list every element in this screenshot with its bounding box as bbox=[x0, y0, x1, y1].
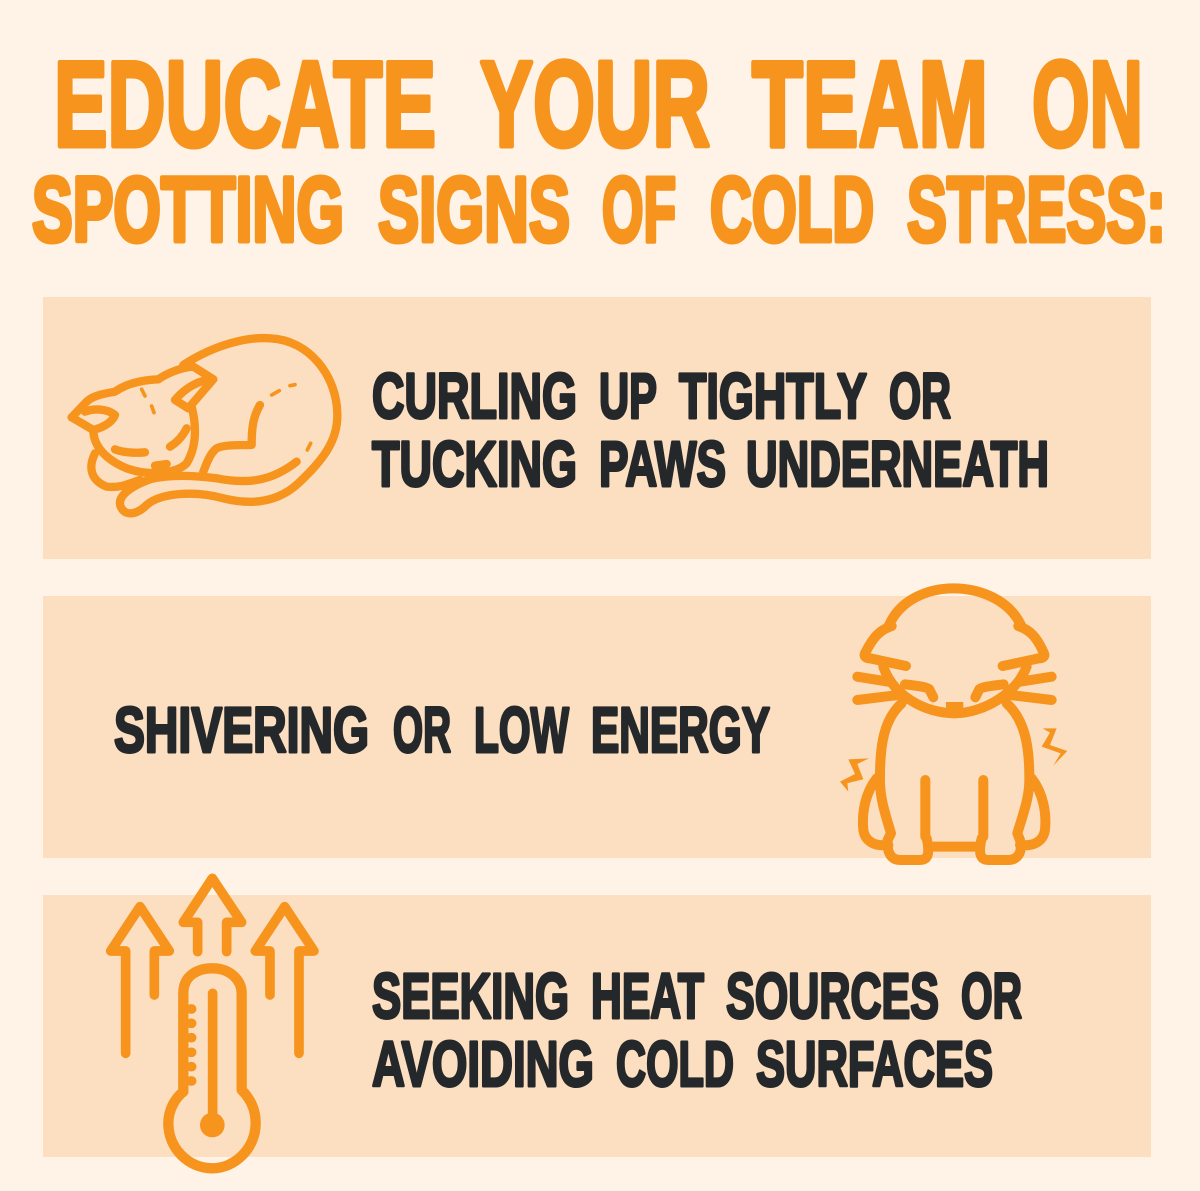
text: seeking heat: SEEKING bbox=[372, 960, 569, 1032]
text: seeking heat: SURFACES bbox=[756, 1028, 993, 1100]
title: EDUCATE bbox=[54, 36, 436, 172]
icon: curled-up cat bbox=[72, 338, 337, 513]
panel: curling up bbox=[43, 297, 1151, 559]
text: seeking heat: SOURCES bbox=[726, 960, 939, 1032]
text: curling up: CURLING bbox=[372, 360, 577, 432]
title: TEAM bbox=[752, 36, 988, 172]
text: shivering: SHIVERING bbox=[114, 694, 369, 766]
text: seeking heat: HEAT bbox=[591, 960, 704, 1032]
text: curling up: TIGHTLY bbox=[679, 360, 867, 432]
text: curling up bbox=[372, 360, 1049, 500]
panel: shivering bbox=[43, 588, 1151, 860]
text: seeking heat: COLD bbox=[616, 1028, 734, 1100]
text: seeking heat: OR bbox=[961, 960, 1022, 1032]
title: YOUR bbox=[480, 36, 710, 172]
text: shivering bbox=[114, 694, 770, 766]
text: shivering: ENERGY bbox=[591, 694, 770, 766]
text: curling up: OR bbox=[889, 360, 951, 432]
text: curling up: PAWS bbox=[599, 428, 726, 500]
text: curling up: UNDERNEATH bbox=[746, 428, 1049, 500]
text: seeking heat: AVOIDING bbox=[372, 1028, 594, 1100]
text: curling up: TUCKING bbox=[372, 428, 577, 500]
icon: shivering cat bbox=[840, 588, 1067, 860]
title: SIGNS bbox=[378, 159, 570, 261]
text: seeking heat bbox=[372, 960, 1022, 1100]
icon: thermometer with rising arrows bbox=[111, 878, 314, 1168]
text: shivering: LOW bbox=[474, 694, 569, 766]
text: shivering: OR bbox=[393, 694, 451, 766]
text: curling up: UP bbox=[599, 360, 657, 432]
panel: seeking heat bbox=[43, 878, 1151, 1168]
title bbox=[32, 36, 1166, 261]
title: OF bbox=[602, 159, 676, 261]
title: SPOTTING bbox=[32, 159, 344, 261]
title: COLD bbox=[710, 159, 874, 261]
